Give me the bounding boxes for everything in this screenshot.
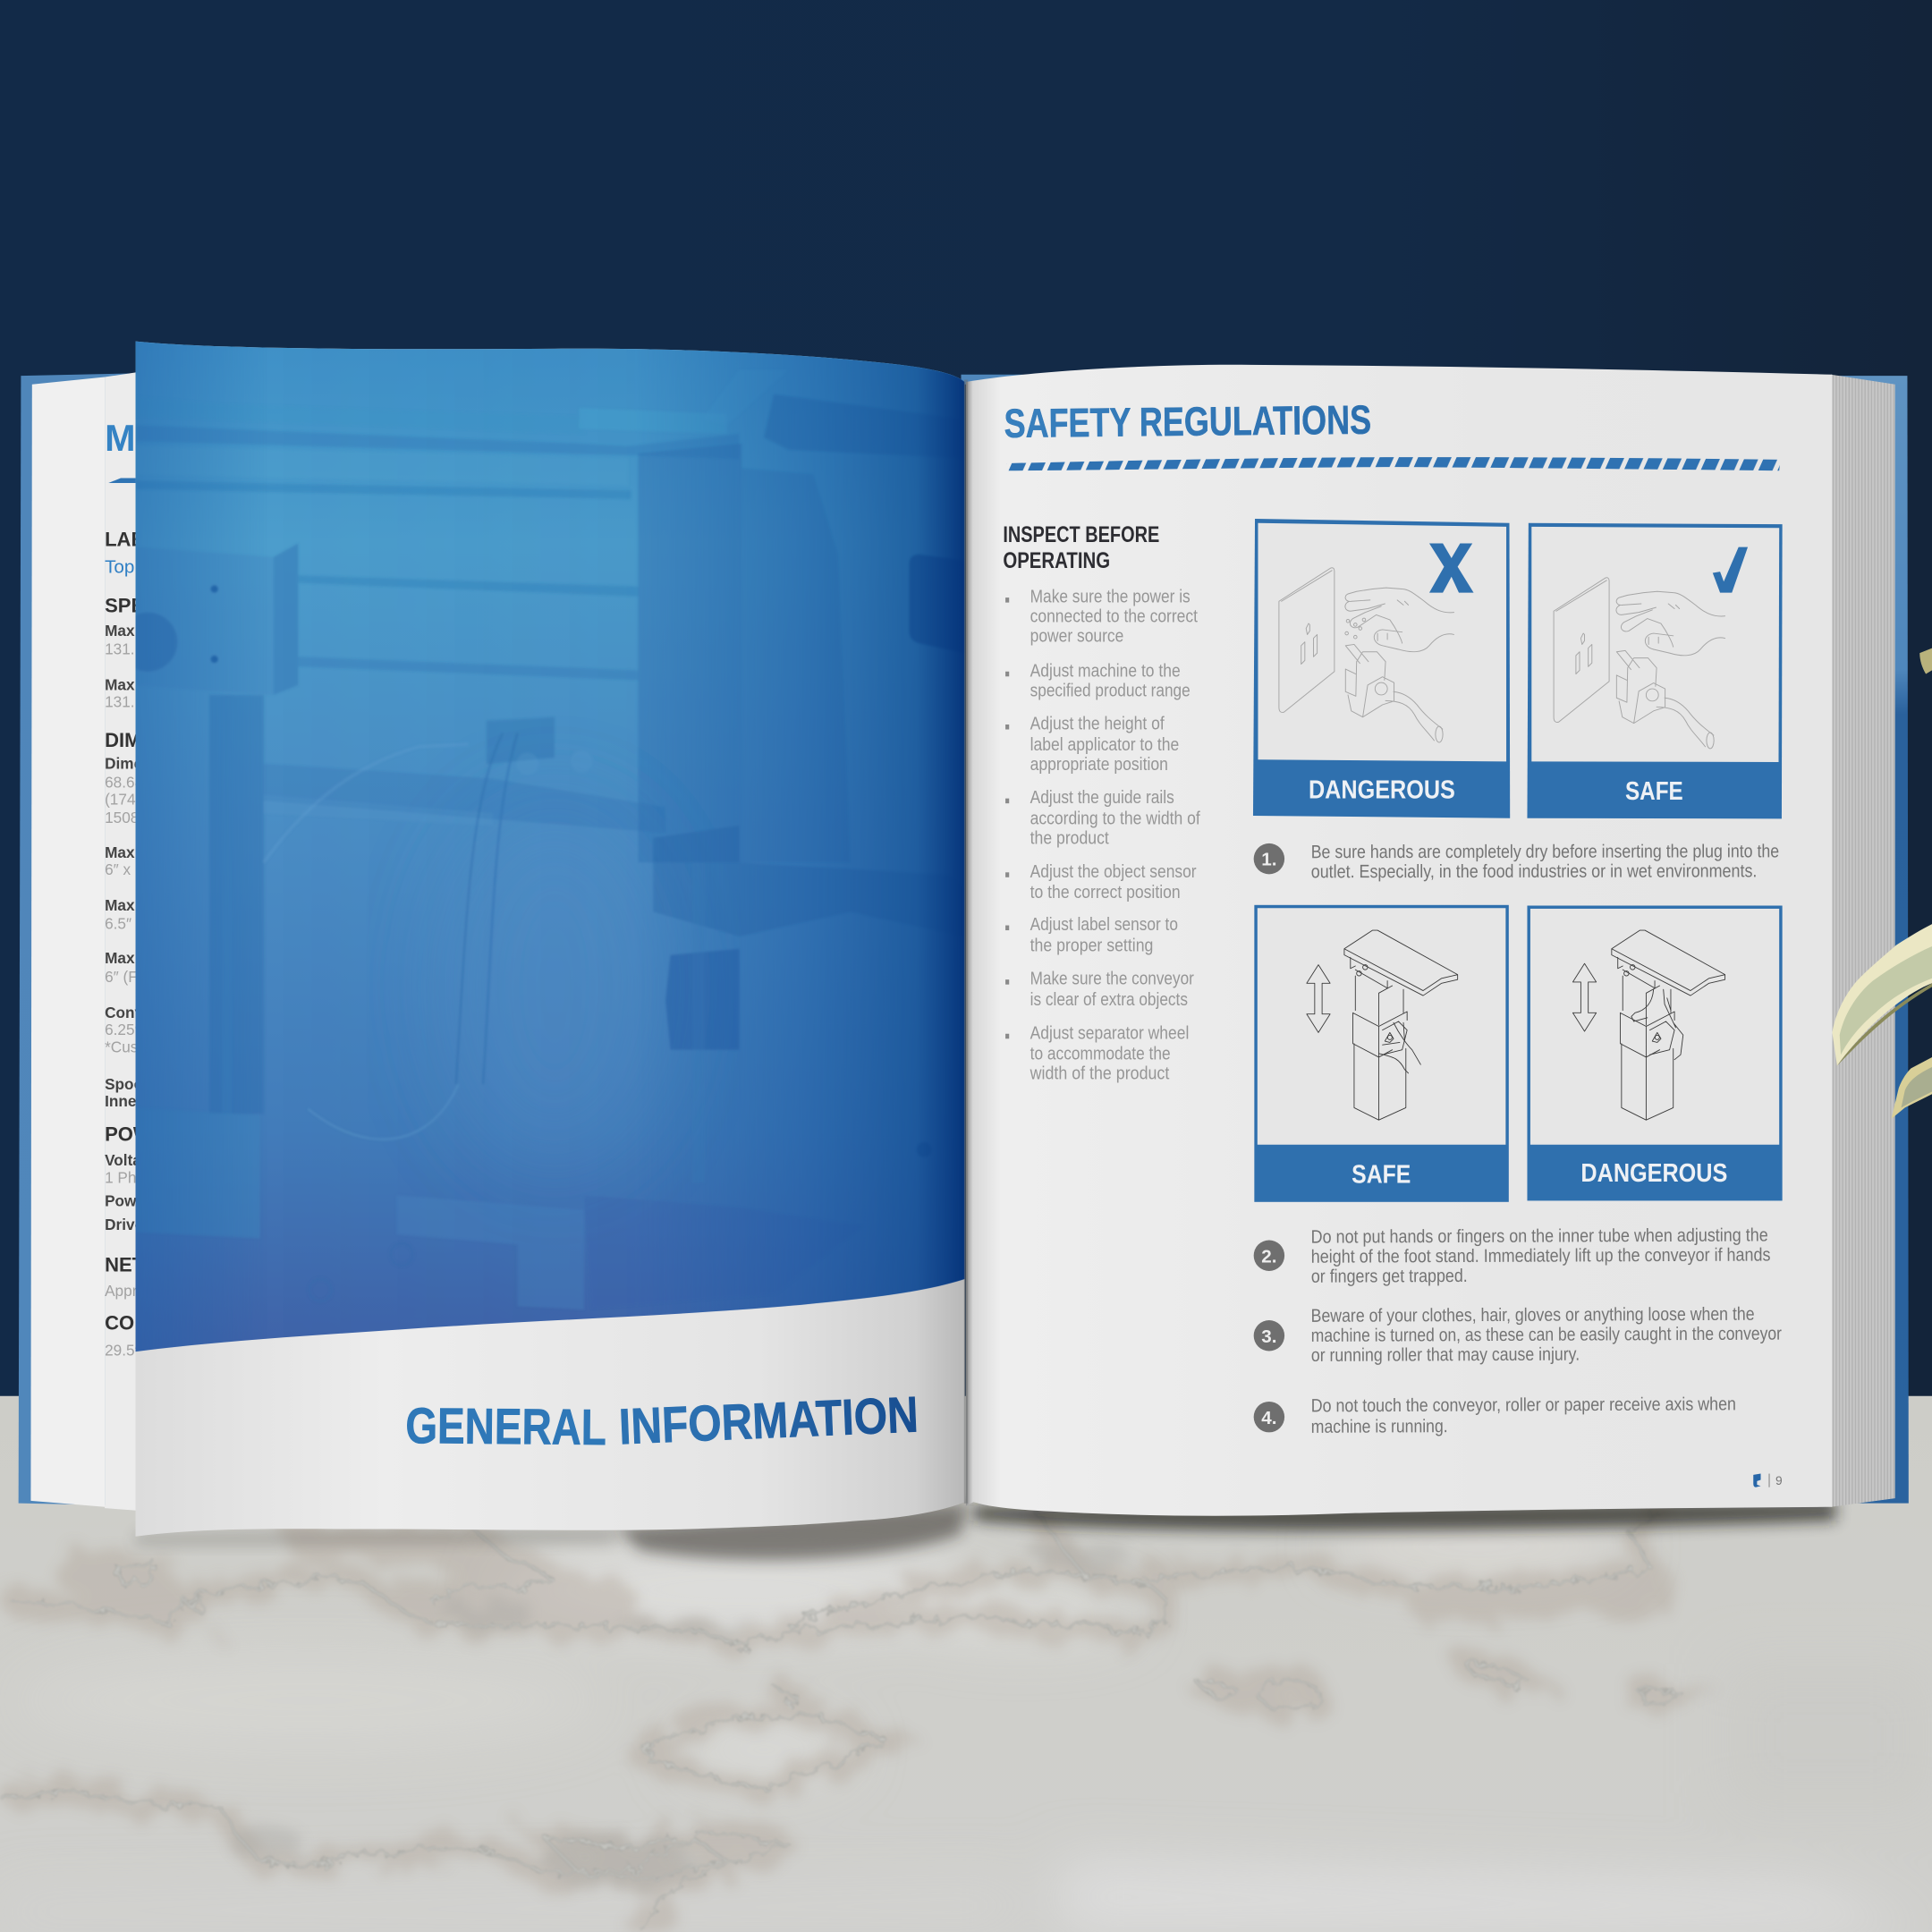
label: dangerous: DANGEROUS [1309, 776, 1455, 805]
partially hidden left page: specification text: 6″ (Fl [105, 968, 141, 986]
step 3 number badge [1254, 1320, 1284, 1351]
background wall [0, 0, 1932, 1397]
book cover top sliver at the spine [961, 375, 1022, 385]
step 3 number badge: 3. [1261, 1326, 1276, 1347]
inspection bullet list: Adjust the object sensor [1030, 861, 1197, 882]
inspection bullet list: Make sure the power is [1030, 587, 1191, 607]
step 2 number badge [1254, 1241, 1284, 1271]
label: safe: SAFE [1352, 1160, 1411, 1189]
partially hidden left page: specification text: 131. [105, 693, 135, 711]
partially hidden left page: specification text: Maxi [105, 675, 139, 693]
dashed title rule [1006, 457, 1781, 470]
step 1 text [1311, 841, 1779, 882]
step 3 text: Beware of your clothes, hair, gloves or anything loose when the [1311, 1304, 1755, 1326]
panel: safe foot stand [1254, 905, 1509, 1202]
inspection bullet list [1005, 587, 1200, 1084]
step 4 text: machine is running. [1311, 1416, 1448, 1437]
inspection bullet list: connected to the correct [1030, 606, 1198, 627]
partially hidden left page: specification text: DIM [105, 729, 140, 751]
step 2 number badge: 2. [1261, 1246, 1276, 1267]
inspection bullet list: label applicator to the [1030, 734, 1179, 755]
step 3 text: or running roller that may cause injury. [1311, 1344, 1580, 1366]
partially hidden left page: specification text: Dime [105, 755, 142, 773]
partially hidden left page: specification text: 1 Pha [105, 1168, 145, 1186]
partially hidden left page: specification text: Inner [105, 1092, 142, 1110]
partially hidden left page: specification text: 68.68 [105, 773, 143, 791]
partially hidden left page: specification text: 6.5″ ( [105, 915, 141, 933]
step 4 text: Do not touch the conveyor, roller or paper receive axis when [1311, 1394, 1736, 1416]
label: safe: SAFE [1625, 777, 1683, 806]
marble dense blotches [228, 1544, 1133, 1887]
partially hidden left page: specification text: *Cust [105, 1038, 142, 1055]
panel: safe plug [1527, 523, 1783, 818]
step 1 number badge: 1. [1261, 850, 1276, 870]
step 2 text: height of the foot stand. Immediately lift up the conveyor if hands [1311, 1244, 1771, 1267]
partially hidden left page: specification text: 1508 [105, 809, 139, 826]
inspection bullet list: Adjust label sensor to [1030, 914, 1178, 935]
step 1 text: outlet. Especially, in the food industries or in wet environments. [1311, 860, 1757, 882]
inspection bullet list: width of the product [1030, 1063, 1170, 1084]
step 4 number badge [1254, 1402, 1284, 1432]
partially hidden left page: specification text [105, 528, 152, 1359]
page number with logo: 9 [1775, 1474, 1783, 1487]
partially hidden left page: specification text: Maxi [105, 843, 139, 861]
partially hidden left page: specification text: Top [105, 557, 134, 578]
step 3 text: machine is turned on, as these can be easily caught in the conveyor [1311, 1324, 1782, 1346]
step 4 number badge: 4. [1261, 1408, 1276, 1428]
book cover: left edge [19, 373, 136, 1505]
illustration: hand on inner tube [1572, 930, 1725, 1120]
book cover: right edge [1811, 376, 1909, 1504]
step 3 text [1311, 1304, 1782, 1366]
inspection bullet list: appropriate position [1030, 754, 1168, 775]
partially hidden left page: specification text: 131. [105, 640, 135, 657]
illustration: dry hands and plug [1554, 578, 1725, 749]
inspection bullet list: power source [1030, 626, 1123, 647]
plant leaf: top fragment [1919, 648, 1932, 674]
partially hidden left page: specification text: POW [105, 1123, 152, 1146]
right page sheet [966, 365, 1832, 1516]
book shadow on table [136, 1501, 1836, 1560]
inspection bullet list: the proper setting [1030, 935, 1153, 955]
step 2 text [1311, 1224, 1771, 1287]
gutter shadow [964, 379, 968, 1504]
label: dangerous: DANGEROUS [1580, 1159, 1727, 1188]
blue panel edge shading [136, 333, 965, 1355]
partially hidden left page: specification text: Conv [105, 1004, 144, 1021]
panel: dangerous plug [1253, 519, 1510, 818]
partially hidden left page: specification text: Maxi [105, 622, 139, 640]
blue cover photo panel [118, 333, 965, 1355]
partially hidden left page: specification text: Appr [105, 1282, 138, 1300]
marble veins [0, 1511, 1682, 1929]
inspection bullet list: the product [1030, 828, 1109, 849]
inspection bullet list: according to the width of [1030, 809, 1200, 829]
inspection bullet list: Adjust machine to the [1030, 660, 1181, 681]
partially hidden left page: specification text: 6.25″ [105, 1021, 140, 1038]
inspection bullet list: to accommodate the [1030, 1044, 1171, 1064]
heading: general information: GENERAL [405, 1397, 606, 1455]
plant leaf: main [1832, 924, 1932, 1066]
partially hidden left page: specification text: Powe [105, 1192, 145, 1210]
machine photo shapes [118, 369, 965, 1309]
plant leaf: lower [1892, 1057, 1932, 1119]
partially hidden left page: specification text: Volta [105, 1151, 141, 1169]
partially hidden left page: specification text: CON [105, 1311, 148, 1334]
inspection bullet list: specified product range [1030, 680, 1191, 700]
left turned page: white sheet [136, 342, 965, 1537]
step 2 text: or fingers get trapped. [1311, 1266, 1468, 1287]
illustration: wet hands and plug [1279, 568, 1454, 742]
partially hidden left page: specification text: 29.5″ [105, 1341, 140, 1359]
partially hidden left page: heading: M [105, 418, 136, 459]
inspection bullet list: Adjust the height of [1030, 714, 1165, 734]
left page stack [30, 372, 152, 1511]
sub-heading: inspect before operating: OPERATING [1003, 549, 1110, 573]
sub-heading: inspect before operating [1003, 523, 1159, 573]
sub-heading: inspect before operating: INSPECT BEFORE [1003, 523, 1159, 547]
marble vein halos [0, 1511, 1682, 1929]
partially hidden left page: specification text: SPE [105, 595, 144, 617]
page number with logo [1753, 1474, 1783, 1487]
inspection bullet list: is clear of extra objects [1030, 989, 1188, 1010]
heading: general information [405, 1386, 919, 1455]
partially hidden left page: specification text: (1744 [105, 791, 145, 809]
inspection bullet list: to the correct position [1030, 882, 1181, 902]
step 4 text [1311, 1394, 1736, 1437]
partially hidden left page: specification text: Drive [105, 1216, 143, 1233]
illustration: hand on outer tube [1307, 930, 1458, 1120]
step 1 text: Be sure hands are completely dry before inserting the plug into the [1311, 841, 1779, 862]
inspection bullet list: Make sure the conveyor [1030, 969, 1194, 989]
inspection bullet list: Adjust separator wheel [1030, 1022, 1189, 1043]
icon: cross mark [1429, 544, 1474, 593]
panel: dangerous foot stand [1527, 905, 1783, 1200]
step 2 text: Do not put hands or fingers on the inner tube when adjusting the [1311, 1224, 1768, 1248]
partially hidden left page: specification text: Maxi [105, 949, 139, 967]
icon: check mark [1713, 547, 1748, 593]
right page stack edge [1831, 375, 1895, 1507]
inspection bullet list: Adjust the guide rails [1030, 787, 1174, 808]
partially hidden left page: specification text: LAB [105, 528, 145, 550]
partially hidden left page: dashes [108, 478, 138, 483]
step 1 number badge [1254, 843, 1284, 874]
partially hidden left page: specification text: Spoo [105, 1075, 143, 1093]
heading: safety regulations: SAFETY REGULATIONS [1004, 397, 1371, 446]
partially hidden left page: specification text: 6″ x 1 [105, 860, 143, 878]
partially hidden left page: specification text: Maxi [105, 896, 139, 914]
marble table [0, 1396, 1932, 1932]
heading: general information: INFORMATION [618, 1386, 919, 1454]
partially hidden left page: specification text: NET [105, 1254, 145, 1276]
